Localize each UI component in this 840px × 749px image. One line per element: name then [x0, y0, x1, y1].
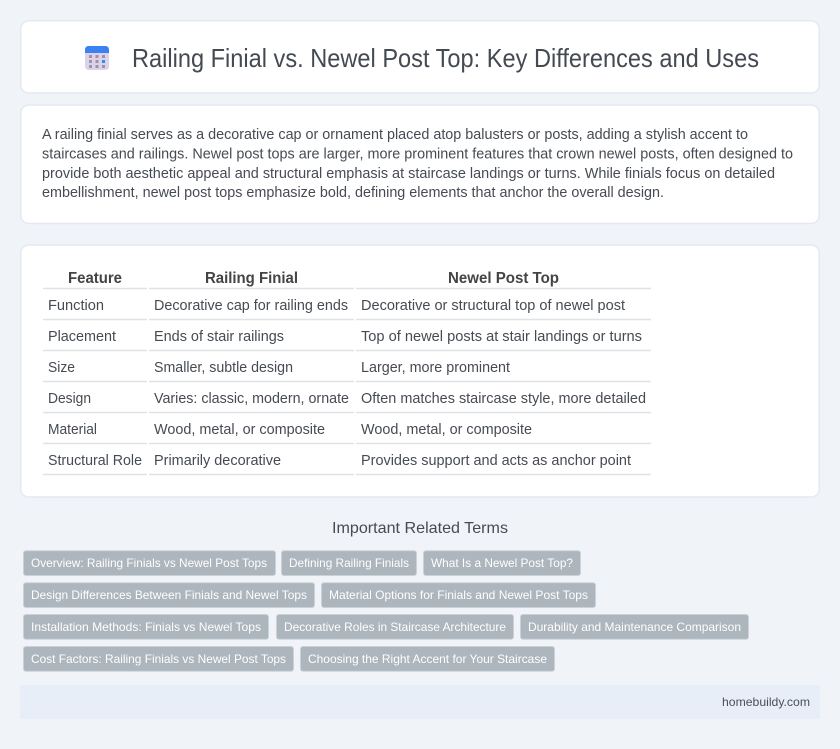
tag: Defining Railing Finials	[289, 556, 409, 570]
title: Railing Finial vs. Newel Post Top: Key Differences and Uses	[132, 45, 759, 73]
tag	[24, 614, 268, 639]
panel: comparison table	[21, 245, 819, 497]
row: structural role: Provides support and acts as anchor point	[361, 453, 631, 469]
panel: header	[21, 21, 819, 93]
row: placement	[48, 329, 642, 345]
row: function: Decorative or structural top of newel post	[361, 298, 625, 314]
row: placement: Top of newel posts at stair landings or turns	[361, 329, 642, 345]
tag	[300, 646, 554, 671]
row: structural role: Primarily decorative	[154, 453, 281, 469]
tag: Cost Factors: Railing Finials vs Newel Post Tops	[31, 652, 286, 666]
row: design	[48, 391, 646, 407]
row: material: Material	[48, 422, 97, 438]
text block: introduction: provide both aesthetic appeal and structural emphasis at staircase landings or turns. While finials focus on detailed	[42, 166, 775, 182]
row: structural role: Structural Role	[48, 453, 142, 469]
footer source text: homebuildy.com	[722, 695, 810, 709]
tag: Material Options for Finials and Newel Post Tops	[329, 588, 588, 602]
row: design: Design	[48, 391, 91, 407]
row: size: Smaller, subtle design	[154, 360, 293, 376]
tag: What Is a Newel Post Top?	[431, 556, 573, 570]
row: size: Larger, more prominent	[361, 360, 510, 376]
row: material: Wood, metal, or composite	[361, 422, 532, 438]
text block: introduction: A railing finial serves as a decorative cap or ornament placed atop balusters or posts, adding a stylish accent to	[42, 127, 748, 143]
table header	[68, 270, 559, 287]
tag	[276, 614, 514, 639]
tag	[322, 583, 596, 608]
table header: Newel Post Top	[448, 270, 559, 287]
tag	[520, 614, 748, 639]
row: material	[48, 422, 532, 438]
panel: related term tags	[24, 551, 748, 671]
tag: Durability and Maintenance Comparison	[528, 620, 741, 634]
text block: introduction: staircases and railings. Newel post tops are larger, more prominent features that crown newel posts, often designed to	[42, 146, 793, 162]
row: placement: Ends of stair railings	[154, 329, 284, 345]
tag: Design Differences Between Finials and Newel Tops	[31, 588, 307, 602]
row: function: Function	[48, 298, 104, 314]
row: design: Often matches staircase style, more detailed	[361, 391, 646, 407]
tag	[24, 551, 276, 576]
row: structural role	[48, 453, 631, 469]
row: material: Wood, metal, or composite	[154, 422, 325, 438]
tag	[282, 551, 416, 576]
row: function	[48, 298, 625, 314]
tag: Decorative Roles in Staircase Architecture	[284, 620, 506, 634]
table header: Railing Finial	[205, 270, 298, 287]
row: design: Varies: classic, modern, ornate	[154, 391, 349, 407]
panel: introduction	[21, 105, 819, 224]
tag: Overview: Railing Finials vs Newel Post Tops	[31, 556, 267, 570]
tag	[424, 551, 580, 576]
row: placement: Placement	[48, 329, 116, 345]
table header: Feature	[68, 270, 122, 287]
tag	[24, 583, 314, 608]
icon: calendar	[85, 46, 109, 70]
footer	[20, 685, 820, 719]
tag: Installation Methods: Finials vs Newel Tops	[31, 620, 261, 634]
row: size	[48, 360, 510, 376]
row: function: Decorative cap for railing ends	[154, 298, 348, 314]
row: size: Size	[48, 360, 75, 376]
text block: introduction	[42, 127, 793, 201]
tag	[24, 646, 294, 671]
heading: related terms: Important Related Terms	[332, 520, 508, 537]
tag: Choosing the Right Accent for Your Staircase	[308, 652, 547, 666]
text block: introduction: embellishment, newel post tops emphasize bold, defining elements that anchor the overall design.	[42, 185, 664, 201]
